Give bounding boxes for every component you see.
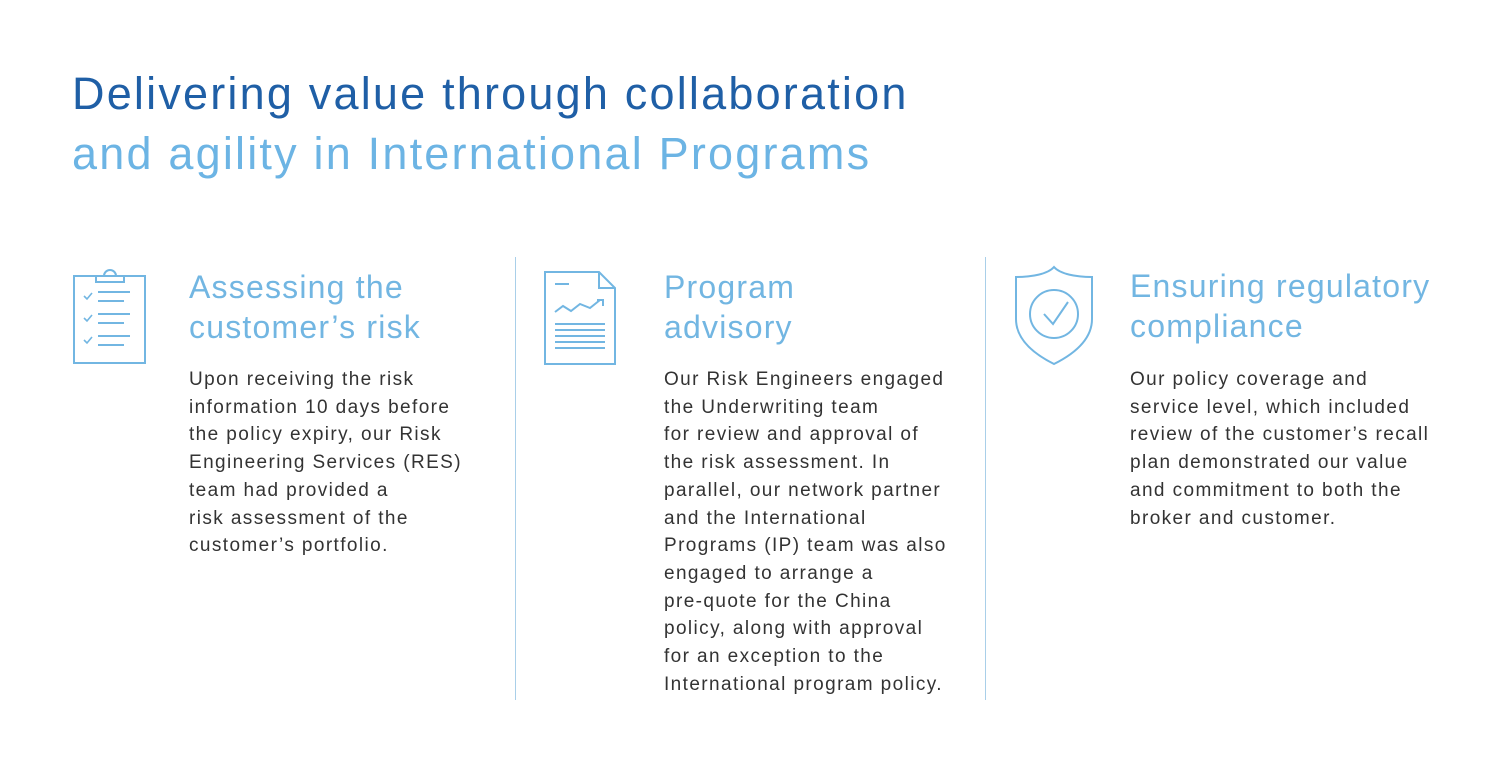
heading: advisory [664, 309, 793, 345]
text: Our Risk Engineers engaged [664, 369, 944, 390]
text: and commitment to both the [1130, 480, 1402, 501]
heading [1130, 268, 1430, 344]
text: service level, which included [1130, 397, 1410, 418]
icon: shield check [1015, 266, 1093, 365]
text [664, 369, 947, 695]
heading: Assessing the [189, 269, 404, 305]
panel: program advisory [544, 269, 947, 695]
heading: compliance [1130, 308, 1304, 344]
icon: document chart [544, 271, 616, 365]
text [1130, 369, 1429, 529]
text: International program policy. [664, 674, 943, 695]
text: information 10 days before [189, 397, 450, 418]
text: the risk assessment. In [664, 452, 890, 473]
text: Our policy coverage and [1130, 369, 1368, 390]
icon: clipboard [73, 269, 146, 364]
text: team had provided a [189, 480, 389, 501]
text: Engineering Services (RES) [189, 452, 462, 473]
text: policy, along with approval [664, 618, 923, 639]
text: risk assessment of the [189, 508, 409, 529]
text: broker and customer. [1130, 508, 1336, 529]
title [72, 68, 909, 179]
heading: Ensuring regulatory [1130, 268, 1430, 304]
text: the policy expiry, our Risk [189, 424, 442, 445]
text: engaged to arrange a [664, 563, 874, 584]
text: for review and approval of [664, 424, 919, 445]
text: Upon receiving the risk [189, 369, 414, 390]
heading [664, 269, 795, 345]
text: plan demonstrated our value [1130, 452, 1409, 473]
text [189, 369, 462, 556]
heading: customer’s risk [189, 309, 421, 345]
text: the Underwriting team [664, 397, 879, 418]
text: pre-quote for the China [664, 591, 892, 612]
heading: Program [664, 269, 795, 305]
text: review of the customer’s recall [1130, 424, 1429, 445]
panel: assessing [73, 269, 462, 556]
panel: compliance [1015, 266, 1430, 529]
text: and the International [664, 508, 867, 529]
text: Programs (IP) team was also [664, 535, 947, 556]
text: for an exception to the [664, 646, 884, 667]
title: and agility in International Programs [72, 128, 871, 179]
heading [189, 269, 421, 345]
text: customer’s portfolio. [189, 535, 389, 556]
title: Delivering value through collaboration [72, 68, 909, 119]
text: parallel, our network partner [664, 480, 941, 501]
